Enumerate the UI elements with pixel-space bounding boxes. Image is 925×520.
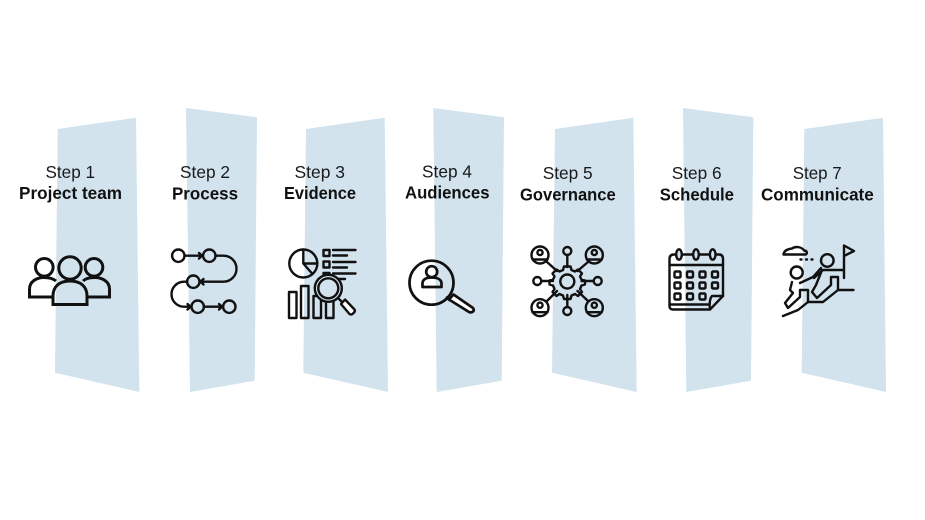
heading: step 7: Communicate	[761, 184, 874, 204]
heading: step 5: Step 5	[543, 163, 593, 183]
panel: step 6 schedule	[660, 108, 753, 392]
heading: step 2	[172, 162, 238, 204]
heading: step 4: Step 4	[422, 162, 472, 182]
heading: step 6: Step 6	[672, 163, 722, 183]
panel: step 2 process	[171, 108, 257, 392]
heading: step 5	[520, 163, 616, 204]
heading: step 3	[284, 162, 356, 203]
heading: step 5: Governance	[520, 184, 616, 204]
panel: step 4 audiences	[405, 108, 504, 392]
background band 4	[433, 108, 504, 392]
icon: process flow	[171, 250, 237, 313]
panel: step 7 communicate	[761, 118, 886, 392]
heading: step 1: Project team	[19, 183, 122, 203]
heading: step 6	[660, 163, 734, 204]
heading: step 2: Step 2	[180, 162, 230, 182]
icon: calendar	[670, 249, 723, 310]
panel: step 5 governance	[520, 118, 637, 392]
heading: step 3: Step 3	[294, 162, 345, 182]
heading: step 7: Step 7	[793, 163, 842, 183]
background band 5	[552, 118, 637, 392]
background band 7	[802, 118, 886, 392]
heading: step 4	[405, 162, 490, 202]
icon: climbers with flag	[783, 246, 854, 316]
heading: step 4: Audiences	[405, 182, 490, 202]
panel: step 3 evidence	[284, 118, 388, 392]
icon: audience search	[410, 261, 474, 312]
heading: step 7	[761, 163, 874, 204]
background band 3	[303, 118, 388, 392]
heading: step 2: Process	[172, 184, 238, 204]
panel: step 1 project team	[19, 118, 139, 392]
background band 2	[186, 108, 257, 392]
icon: team of people	[30, 257, 110, 304]
icon: charts and magnifier	[289, 250, 356, 318]
background band 6	[683, 108, 753, 392]
icon: governance network	[532, 246, 603, 316]
heading: step 3: Evidence	[284, 183, 356, 203]
heading: step 1	[19, 162, 122, 203]
heading: step 1: Step 1	[46, 162, 95, 182]
background band 1	[55, 118, 139, 392]
heading: step 6: Schedule	[660, 184, 734, 204]
